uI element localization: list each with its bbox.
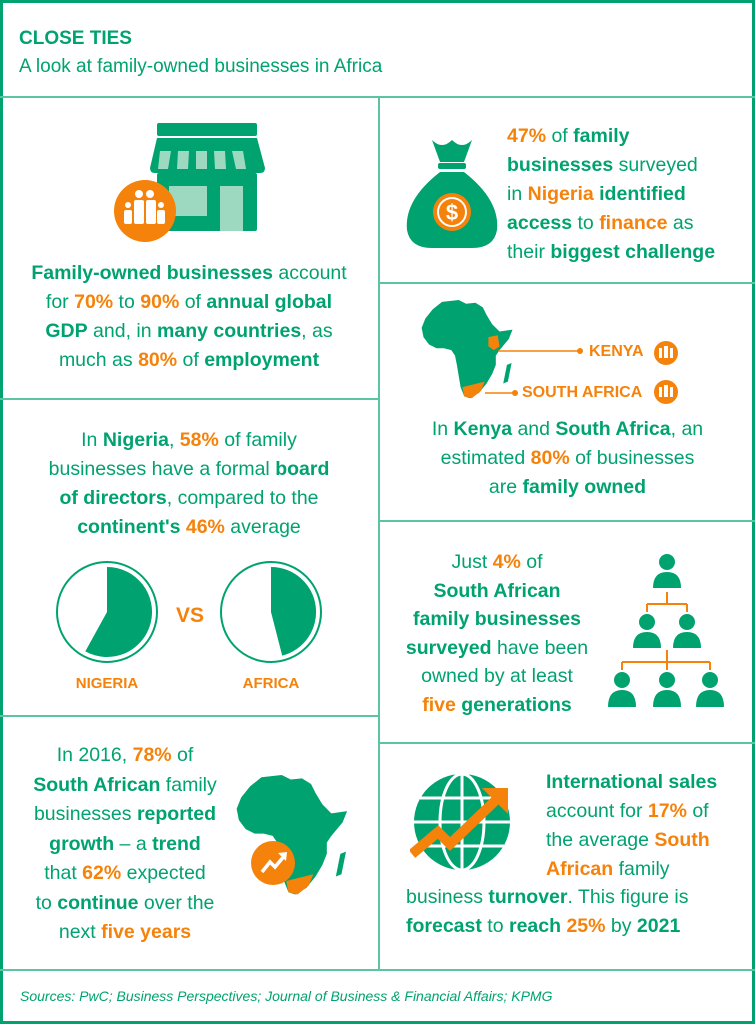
text: finance stat: 47% of family	[507, 125, 630, 147]
text: GDP stat: Family-owned businesses account	[31, 262, 347, 284]
text: board stat: In Nigeria, 58% of family	[81, 429, 297, 451]
text: Kenya SA stat: are family owned	[489, 476, 646, 498]
chart: pie comparison: VS	[176, 604, 204, 627]
text: GDP stat: for 70% to 90% of annual global	[46, 291, 332, 313]
text: Kenya SA stat	[432, 418, 703, 498]
text: growth stat: South African family	[33, 774, 217, 796]
icon: family tree	[608, 554, 724, 707]
text: finance stat: access to finance as	[507, 212, 693, 234]
text: Kenya SA stat: In Kenya and South Africa, an	[432, 418, 703, 440]
chart: pie comparison: AFRICA	[243, 675, 299, 692]
text: board stat	[49, 429, 329, 538]
text: international sales stat: the average South	[546, 829, 710, 851]
text: growth stat	[33, 744, 217, 943]
sources footer: Sources: PwC; Business Perspectives; Journal of Business & Financial Affairs; KPMG	[20, 988, 552, 1004]
icon: shop with family	[114, 123, 265, 242]
text: generations stat: five generations	[422, 694, 572, 716]
text: growth stat: growth – a trend	[49, 832, 201, 854]
panel: global GDP	[31, 123, 347, 371]
text: generations stat: Just 4% of	[451, 551, 543, 573]
panel: international sales: forecast to reach 25% by 2021	[406, 915, 680, 937]
map: Africa with Kenya and South Africa	[422, 300, 512, 398]
text: international sales stat: African family	[546, 858, 670, 880]
icon: globe with arrow	[410, 774, 510, 870]
text: generations stat: South African	[433, 580, 561, 602]
text: generations stat: family businesses	[413, 608, 581, 630]
text: finance stat	[507, 125, 715, 263]
text: finance stat: businesses surveyed	[507, 154, 698, 176]
text: finance stat: in Nigeria identified	[507, 183, 686, 205]
text: generations stat: surveyed have been	[406, 636, 588, 658]
panel: Nigeria finance	[406, 125, 715, 263]
panel: Kenya South Africa	[422, 300, 703, 498]
text: growth stat: businesses reported	[34, 803, 216, 825]
label: South Africa: SOUTH AFRICA	[522, 384, 642, 401]
text: growth stat: that 62% expected	[44, 862, 206, 884]
text: board stat: of directors, compared to the	[59, 487, 319, 509]
subtitle: A look at family-owned businesses in Africa	[19, 56, 382, 77]
text: GDP stat	[31, 262, 347, 371]
chart: pie comparison: NIGERIA	[76, 675, 138, 692]
text: international sales stat: account for 17% of	[546, 800, 709, 822]
panel: growth	[33, 744, 348, 943]
text: growth stat: to continue over the	[36, 892, 214, 914]
text: board stat: continent's 46% average	[77, 516, 301, 538]
text: growth stat: In 2016, 78% of	[57, 744, 193, 766]
text: GDP stat: GDP and, in many countries, as	[45, 320, 333, 342]
panel: board of directors	[49, 429, 329, 692]
icon: money bag	[406, 140, 498, 248]
panel: five generations	[406, 551, 724, 716]
text: growth stat: next five years	[59, 921, 191, 943]
panel: international sales	[406, 771, 717, 937]
text: international sales stat	[546, 771, 717, 880]
text: finance stat: their biggest challenge	[507, 241, 715, 263]
text: GDP stat: much as 80% of employment	[59, 349, 319, 371]
text: Kenya SA stat: estimated 80% of businesses	[441, 447, 694, 469]
text: generations stat: owned by at least	[421, 665, 573, 687]
text: generations stat	[406, 551, 588, 716]
icon: money bag: $	[446, 200, 458, 225]
label: Kenya: KENYA	[589, 343, 644, 360]
text: board stat: businesses have a formal board	[49, 458, 329, 480]
chart: pie comparison	[56, 561, 322, 692]
icon: Africa map with growth badge	[236, 775, 348, 894]
panel: international sales: business turnover. This figure is	[406, 886, 689, 908]
text: international sales stat: International sales	[546, 771, 717, 793]
title: CLOSE TIES	[19, 28, 132, 49]
